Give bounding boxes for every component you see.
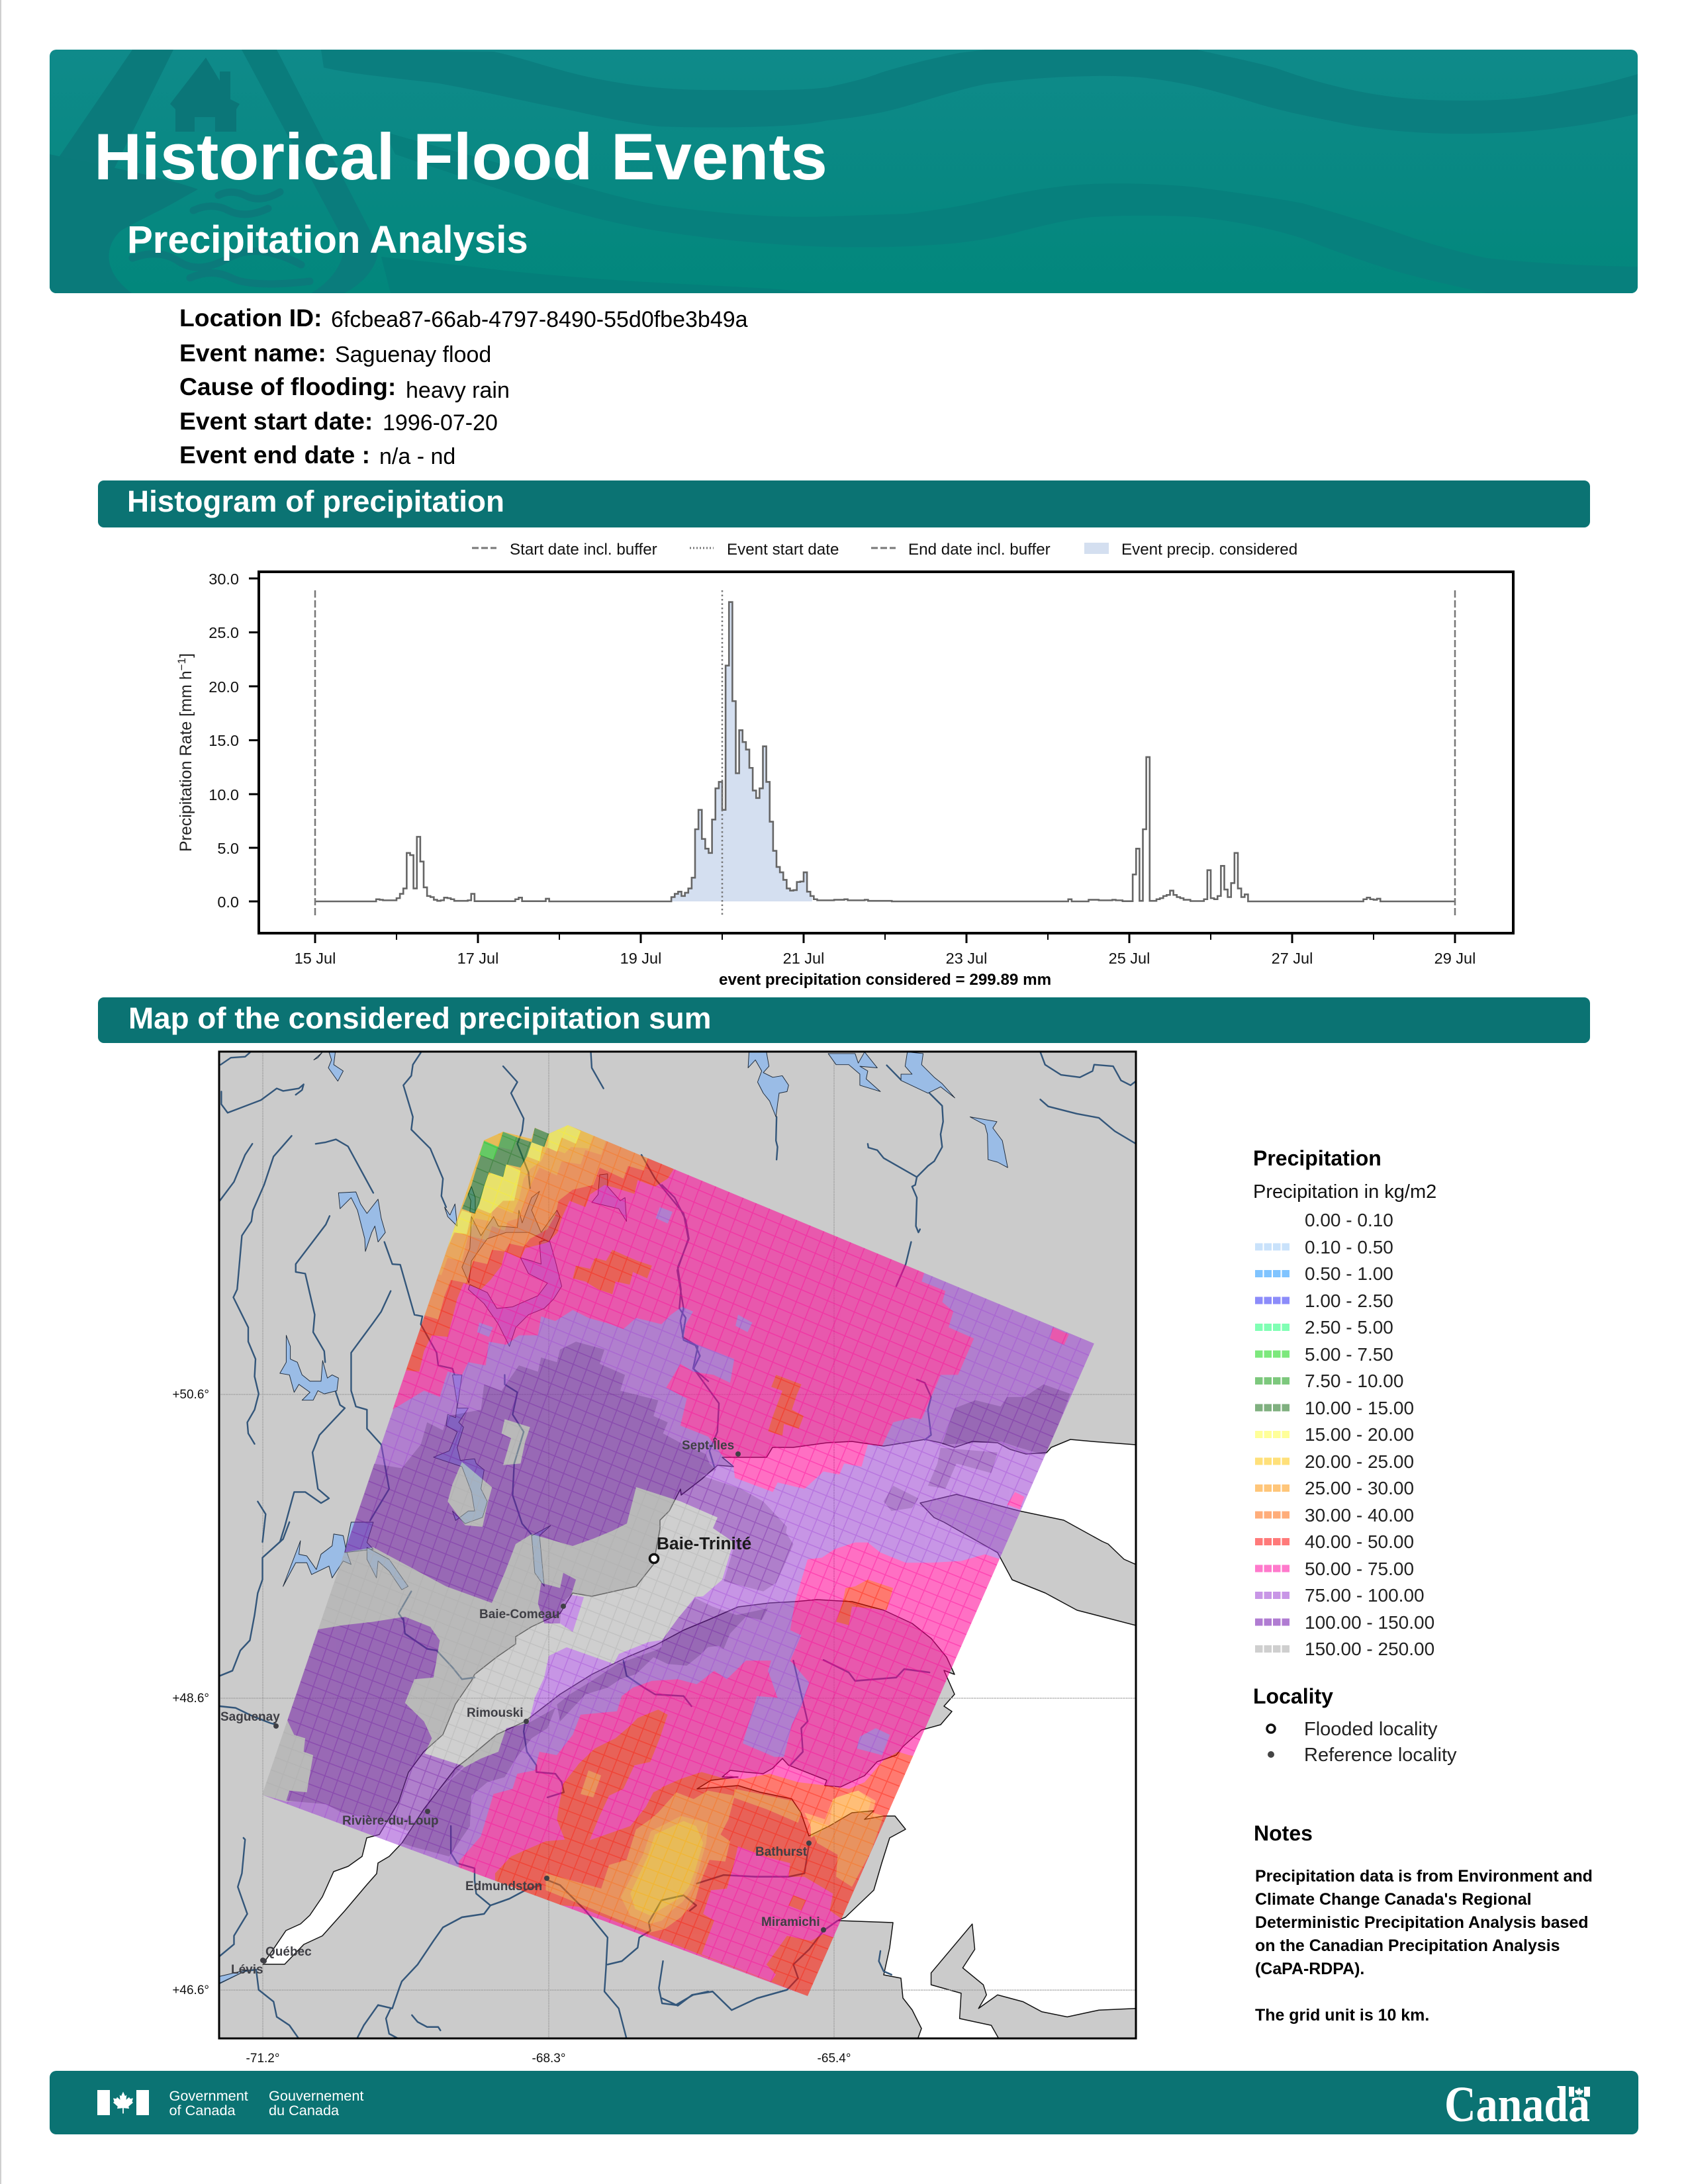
legend class labels: 0.50 - 1.00 (1305, 1263, 1393, 1284)
government wordmark english: Government (169, 2087, 248, 2104)
legend class labels: 25.00 - 30.00 (1305, 1478, 1414, 1498)
y axis labels: 0.0 (217, 893, 239, 911)
x axis labels: 27 Jul (1272, 950, 1313, 967)
rivers: south east (662, 1660, 929, 2010)
notes body: Climate Change Canada's Regional (1255, 1890, 1532, 1909)
flooded locality marker: Baie-Trinité (657, 1533, 751, 1553)
government wordmark french: Gouvernement (269, 2087, 363, 2104)
legend class labels: 20.00 - 25.00 (1305, 1451, 1414, 1472)
rivers and lakes: north west (220, 1052, 708, 1542)
notes body: Deterministic Precipitation Analysis based (1255, 1913, 1589, 1932)
legend class labels: 30.00 - 40.00 (1305, 1505, 1414, 1525)
latitude labels (172, 1388, 209, 1997)
rivers and lakes: south west (220, 1522, 708, 2039)
reference date lines (315, 590, 1455, 917)
cause of flooding: Cause of flooding: (179, 373, 396, 400)
reference localities: Bathurst (755, 1845, 808, 1859)
notes body: The grid unit is 10 km. (1255, 2006, 1429, 2025)
flooded locality marker (650, 1533, 751, 1563)
rivers and lakes: north east (662, 1052, 1136, 1467)
locality legend (1253, 1684, 1457, 1766)
event name (179, 339, 491, 367)
notes body (1255, 1867, 1593, 2025)
event metadata block (179, 304, 748, 469)
x axis labels: 29 Jul (1434, 950, 1476, 967)
x axis labels: 19 Jul (620, 950, 661, 967)
longitude labels: -68.3° (532, 2052, 565, 2066)
y axis labels: 10.0 (209, 786, 239, 803)
Canada wordmark: Canada (1444, 2077, 1590, 2132)
legend class labels: 100.00 - 150.00 (1305, 1612, 1434, 1633)
government wordmark french: du Canada (269, 2102, 340, 2118)
y axis labels: 25.0 (209, 624, 239, 641)
south west field (286, 1573, 729, 1856)
reference localities: Rivière-du-Loup (342, 1814, 439, 1828)
y axis labels: 30.0 (209, 570, 239, 588)
legend class labels: 50.00 - 75.00 (1305, 1559, 1414, 1579)
reference localities: Sept-Îles (682, 1438, 734, 1453)
precipitation legend (1253, 1146, 1436, 1659)
legend class labels: 1.00 - 2.50 (1305, 1291, 1393, 1311)
longitude labels: -71.2° (246, 2052, 279, 2066)
map frame (219, 1052, 1136, 2038)
section bar: map (98, 997, 1590, 1043)
150-250 band (262, 1487, 733, 1802)
subtitle: Precipitation Analysis (127, 218, 528, 261)
flooded locality key: Flooded locality (1304, 1719, 1438, 1740)
west red lobe (495, 1709, 681, 1911)
header banner (50, 50, 1638, 293)
footer bar (50, 2071, 1638, 2134)
notes (1254, 1821, 1593, 2025)
x axis labels: 17 Jul (457, 950, 498, 967)
south east pink field (702, 1846, 844, 1981)
legend subtitle: Precipitation in kg/m2 (1253, 1181, 1436, 1203)
histogram chart (175, 570, 1513, 989)
precipitation step line (315, 602, 1455, 901)
event start date (179, 407, 498, 435)
event end date: n/a - nd (379, 444, 455, 469)
latitude labels: +50.6° (172, 1388, 209, 1402)
event total caption: event precipitation considered = 299.89 mm (719, 971, 1051, 989)
legend class labels: 10.00 - 15.00 (1305, 1398, 1414, 1418)
plot frame (259, 572, 1513, 933)
government wordmark english: of Canada (169, 2102, 236, 2118)
reference localities: Saguenay (220, 1710, 280, 1724)
legend class labels: 40.00 - 50.00 (1305, 1531, 1414, 1552)
Anticosti island (920, 1494, 1142, 1625)
cause of flooding: heavy rain (406, 378, 510, 403)
y axis title: Precipitation Rate [mm h−1] (175, 653, 195, 852)
north precipitation field (zoom coordinates) (306, 1077, 1069, 1615)
orange fields (545, 1791, 735, 1933)
legend: start date: Start date incl. buffer (510, 541, 657, 559)
location id: 6fcbea87-66ab-4797-8490-55d0fbe3b49a (331, 307, 748, 332)
north east patches (678, 1385, 1070, 1542)
southern red field (495, 1752, 931, 2012)
notes heading: Notes (1254, 1821, 1313, 1845)
y axis labels: 20.0 (209, 678, 239, 696)
reference localities: Edmundston (465, 1880, 542, 1893)
section bar: map: Map of the considered precipitation sum (128, 1001, 711, 1035)
header watermark waves and flood icon (50, 50, 1638, 293)
St Lawrence water (263, 1439, 1142, 2045)
precipitation grid layer (262, 1077, 1094, 2028)
location id: Location ID: (179, 304, 322, 332)
section bar: histogram: Histogram of precipitation (127, 484, 504, 518)
legend class labels: 5.00 - 7.50 (1305, 1344, 1393, 1365)
x axis labels: 23 Jul (946, 950, 987, 967)
warm corner bands (370, 1077, 676, 1372)
event name: Saguenay flood (335, 342, 491, 367)
axis ticks (249, 578, 1455, 943)
notes body: on the Canadian Precipitation Analysis (1255, 1936, 1560, 1955)
event start date: 1996-07-20 (383, 410, 498, 435)
reference localities: Rimouski (467, 1706, 524, 1720)
histogram legend (472, 541, 1297, 559)
y axis labels: 15.0 (209, 732, 239, 749)
100-150 northern block (306, 1342, 716, 1615)
graticule (219, 1052, 1136, 2038)
legend: end date: End date incl. buffer (908, 541, 1051, 559)
south east field (459, 1522, 1010, 2028)
y axis labels: 5.0 (217, 840, 239, 857)
Prince Edward Island and Nova Scotia (931, 1924, 1137, 2042)
legend heading: Precipitation (1253, 1146, 1382, 1170)
event end date: Event end date : (179, 441, 370, 469)
y axis labels (209, 570, 239, 911)
map panel (50, 1052, 1638, 2134)
latitude labels: +48.6° (172, 1692, 209, 1706)
legend class labels: 7.50 - 10.00 (1305, 1371, 1403, 1391)
land base (219, 1052, 1136, 2038)
cause of flooding (179, 373, 510, 403)
event name: Event name: (179, 339, 326, 367)
section bar: histogram (98, 480, 1590, 527)
x axis labels: 21 Jul (783, 950, 824, 967)
reference locality key: Reference locality (1304, 1745, 1457, 1766)
longitude labels: -65.4° (818, 2052, 851, 2066)
location id (179, 304, 748, 332)
event end date (179, 441, 455, 469)
legend class labels (1305, 1210, 1434, 1659)
legend swatches (1255, 1247, 1289, 1649)
government flag symbol (97, 2090, 149, 2115)
latitude labels: +46.6° (172, 1983, 209, 1997)
legend class labels: 150.00 - 250.00 (1305, 1639, 1434, 1659)
locality legend: Locality (1253, 1684, 1333, 1708)
legend class labels: 0.10 - 0.50 (1305, 1237, 1393, 1257)
notes body: (CaPA-RDPA). (1255, 1960, 1364, 1978)
notes body: Precipitation data is from Environment and (1255, 1867, 1593, 1886)
grid cell lines (262, 1077, 1094, 2028)
longitude labels (246, 2052, 851, 2066)
legend: event start: Event start date (727, 541, 839, 559)
x axis labels: 15 Jul (295, 950, 336, 967)
legend class labels: 15.00 - 20.00 (1305, 1424, 1414, 1445)
legend: event precip: Event precip. considered (1121, 541, 1297, 559)
reference localities: Lévis (231, 1963, 263, 1977)
reference localities: Baie-Comeau (479, 1608, 559, 1621)
event start date: Event start date: (179, 407, 373, 435)
legend class labels: 75.00 - 100.00 (1305, 1585, 1425, 1606)
reference localities (220, 1438, 826, 1977)
legend class labels: 2.50 - 5.00 (1305, 1317, 1393, 1338)
reference localities: Miramichi (761, 1915, 820, 1929)
legend class labels: 0.00 - 0.10 (1305, 1210, 1393, 1230)
x axis labels: 25 Jul (1109, 950, 1150, 967)
reference localities: Québec (265, 1945, 312, 1959)
base 75-100 class (262, 1092, 1094, 1996)
x axis labels (295, 950, 1476, 967)
event precipitation fill (671, 602, 812, 901)
title: Historical Flood Events (94, 120, 827, 194)
